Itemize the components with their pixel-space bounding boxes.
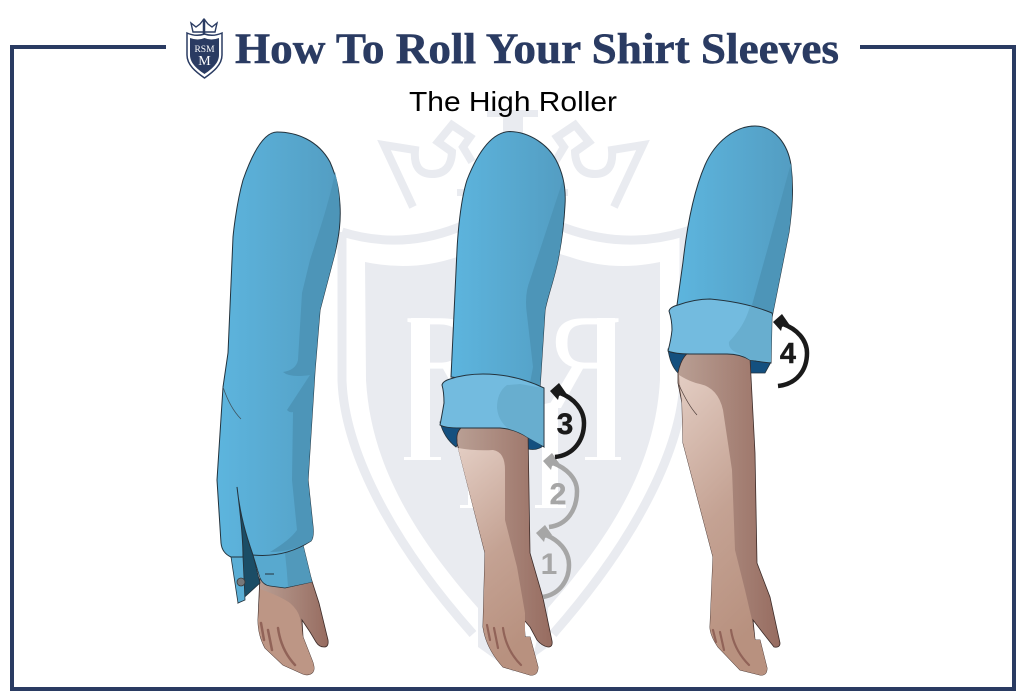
cuff underside — [668, 345, 771, 373]
arrow 3 with number: 3 — [557, 408, 573, 441]
watermark: crest: R — [404, 286, 484, 438]
arrow 2 with number: 2 — [550, 478, 566, 511]
sleeve — [451, 132, 565, 387]
title: How To Roll Your Shirt Sleeves — [235, 26, 839, 73]
sleeve shadow — [270, 172, 340, 552]
cuff — [253, 545, 312, 588]
illustration: full-length sleeve arm — [217, 132, 340, 675]
rolled cuff — [668, 299, 772, 363]
watermark: crest: R — [542, 286, 622, 438]
cuff underside — [440, 420, 544, 450]
arrow 4 with number: 4 — [780, 338, 796, 370]
subtitle: The High Roller — [409, 86, 617, 117]
thumb gap — [524, 620, 537, 652]
cuff underlap with button — [231, 487, 260, 603]
sleeve shadow — [526, 180, 564, 387]
sleeve — [677, 126, 792, 317]
arrow 2 with number — [543, 453, 577, 527]
logo: crest icon: RSM — [194, 45, 215, 55]
hand — [258, 575, 328, 675]
watermark: crest — [342, 110, 684, 672]
forearm — [678, 346, 780, 675]
arrow 1 with number — [536, 525, 569, 597]
arrow 4 with number — [773, 314, 807, 386]
illustration: rolled sleeve arm (right) — [668, 126, 792, 675]
arrow 3 with number — [550, 383, 584, 457]
arrow 1 with number: 1 — [541, 548, 557, 581]
rolled cuff — [440, 374, 544, 447]
logo: crest icon — [187, 19, 222, 78]
sleeve shadow — [752, 163, 792, 317]
sleeve — [217, 132, 340, 557]
forearm — [457, 422, 552, 675]
logo: crest icon: M — [198, 54, 211, 69]
illustration: rolled sleeve arm (middle) — [440, 132, 565, 675]
